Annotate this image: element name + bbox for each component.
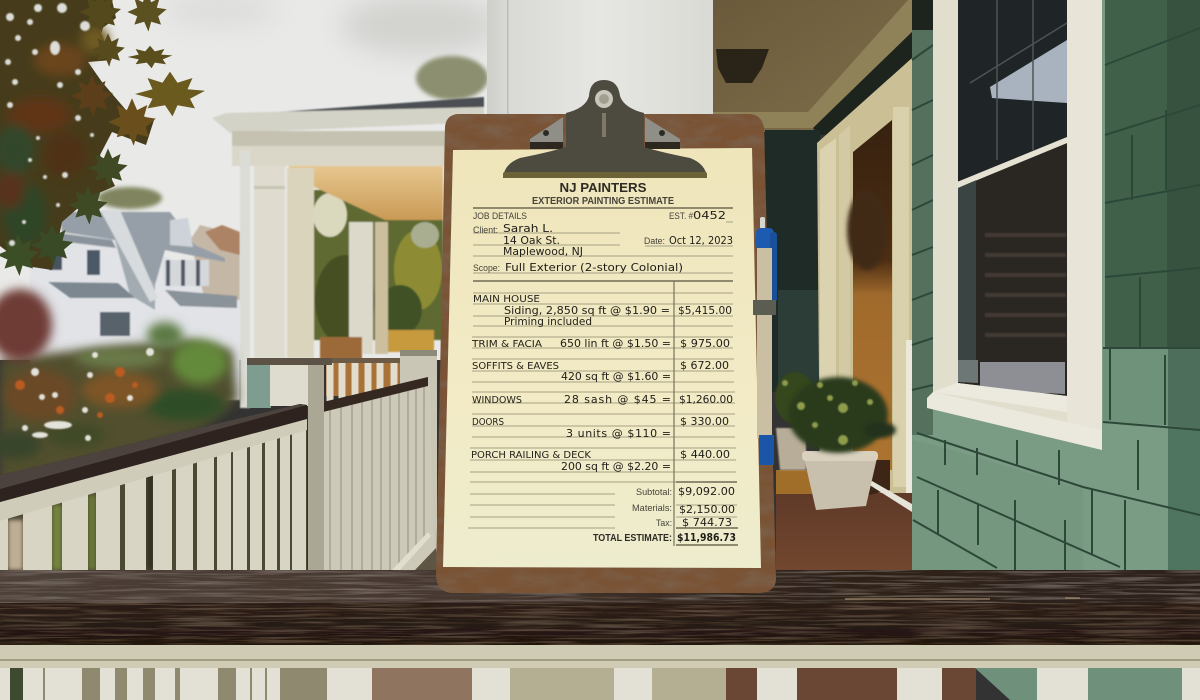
job details: Client: [473, 225, 498, 235]
upper glass [958, 0, 1067, 183]
clip body [503, 80, 707, 178]
railing post [247, 358, 332, 570]
job details: EST. # [669, 211, 693, 221]
window [927, 0, 1102, 450]
porch floor [776, 460, 912, 572]
dark handrail [0, 404, 307, 502]
totals: Subtotal: [636, 487, 672, 498]
estimate heading: NJ PAINTERS [560, 180, 647, 195]
right green shingle wall [912, 0, 1200, 572]
totals: $11,986.73 [677, 531, 736, 544]
background: sky [0, 0, 500, 360]
near railing gaps [0, 430, 307, 572]
job details: Full Exterior (2-story Colonial) [505, 261, 683, 274]
clipboard [436, 80, 777, 593]
line items: PORCH RAILING & DECK [471, 450, 592, 461]
front pot [802, 451, 878, 510]
estimate heading [532, 180, 674, 207]
potted plants [775, 372, 896, 510]
line items: Priming included [504, 315, 592, 328]
line items: 200 sq ft @ $2.20 = [561, 460, 671, 473]
background: distant trees [98, 56, 488, 209]
totals [593, 485, 736, 544]
line items [471, 294, 733, 473]
ruled lines [468, 208, 738, 546]
foliage [782, 377, 896, 453]
job details: JOB DETAILS [473, 211, 527, 221]
job details: Sarah L. [503, 222, 553, 235]
front wooden handrail [0, 570, 1200, 645]
clipboard board [436, 114, 776, 593]
porch light [716, 49, 769, 83]
edge leaves [0, 0, 205, 276]
line items: DOORS [472, 417, 504, 428]
totals: Materials: [632, 503, 672, 514]
lower glass [958, 143, 1067, 396]
job details: Date: [644, 236, 665, 246]
line items: 3 units @ $110 = [566, 427, 671, 440]
job details: Scope: [473, 263, 500, 273]
porch garden greenery [313, 190, 443, 345]
estimate heading: EXTERIOR PAINTING ESTIMATE [532, 196, 674, 207]
window sill [933, 383, 1067, 412]
job details: 0452 [693, 209, 726, 222]
line items: TRIM & FACIA [471, 339, 543, 350]
job details: Maplewood, NJ [503, 245, 583, 258]
line items: MAIN HOUSE [473, 294, 540, 305]
totals: TOTAL ESTIMATE: [593, 533, 672, 544]
totals: $2,150.00 [679, 503, 735, 516]
main column upper [487, 0, 713, 114]
totals: $ 744.73 [682, 516, 732, 529]
clip wings [530, 117, 563, 148]
job details: 14 Oak St. [503, 234, 560, 247]
rear pot [775, 372, 815, 470]
metal clip [503, 80, 707, 178]
paper sheet [443, 148, 761, 568]
job details [473, 209, 733, 274]
near railing balusters [0, 425, 306, 570]
line items: $ 975.00 [680, 337, 730, 350]
shrubs with autumn foliage [0, 289, 238, 490]
dark shingle wall [765, 130, 820, 392]
line items: 28 sash @ $45 = [564, 393, 671, 406]
window frame [933, 0, 1102, 435]
door wreath [847, 190, 887, 270]
porch ceiling [713, 0, 932, 135]
background: neighbouring house [30, 210, 240, 400]
tree leaves, top left [0, 0, 205, 276]
totals: Tax: [656, 518, 672, 529]
line items: 650 lin ft @ $1.50 = [560, 337, 671, 350]
pen [753, 217, 777, 465]
porch railing at left [0, 350, 438, 572]
far railing section [247, 350, 438, 572]
near railing bottom rail [0, 418, 307, 521]
line items: 420 sq ft @ $1.60 = [561, 370, 671, 383]
bottom rail and balusters [0, 645, 1200, 700]
line items: WINDOWS [472, 395, 522, 406]
reflection [990, 40, 1067, 103]
front door and frame [817, 58, 912, 505]
line items: $ 330.00 [680, 415, 729, 428]
line items: $ 440.00 [680, 448, 730, 461]
line items: $1,260.00 [679, 393, 733, 406]
meeting rail [957, 137, 1067, 188]
line items: Siding, 2,850 sq ft @ $1.90 = [504, 304, 670, 317]
job details: Oct 12, 2023 [669, 234, 733, 247]
line items: $5,415.00 [678, 304, 732, 317]
totals: $9,092.00 [678, 485, 735, 498]
background: neighbouring porch [212, 97, 484, 408]
line items: SOFFITS & EAVES [472, 361, 559, 372]
line items: $ 672.00 [680, 359, 729, 372]
